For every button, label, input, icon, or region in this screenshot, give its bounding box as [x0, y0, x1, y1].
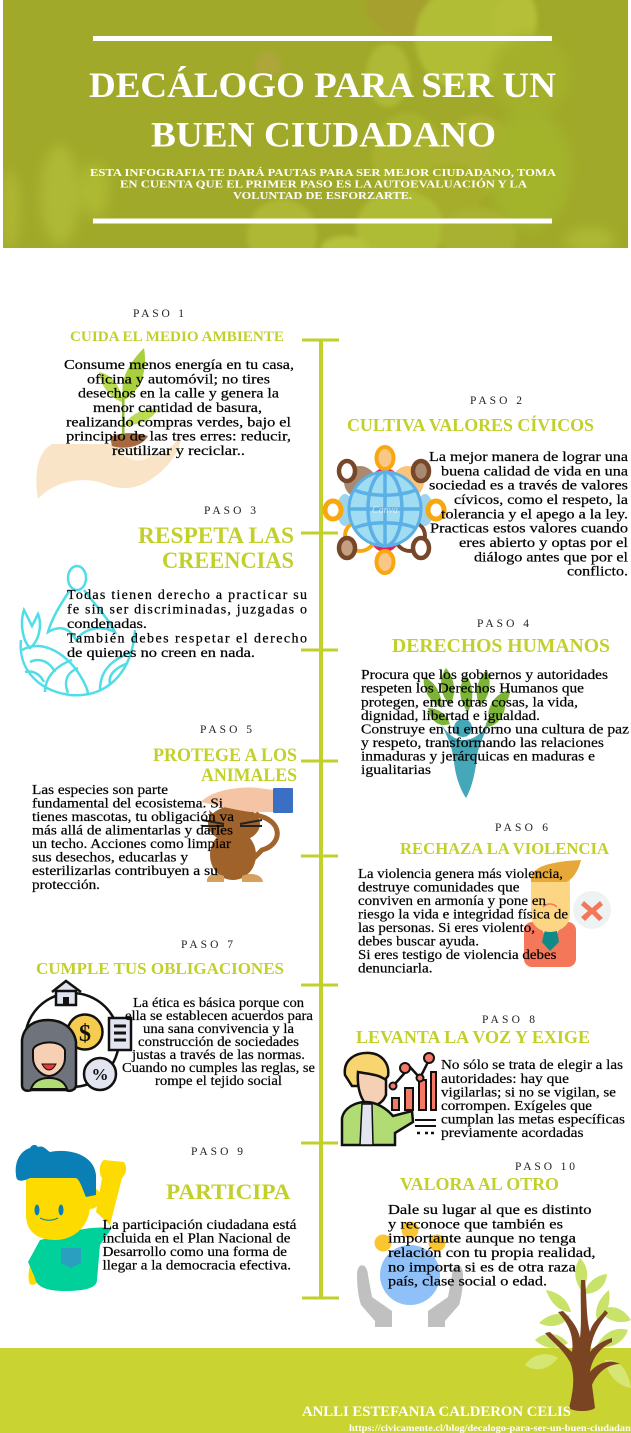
body text: La ética es básica porque con: [133, 995, 304, 1010]
body text: Cuando no cumples las reglas, se: [122, 1060, 315, 1075]
body text: principio de las tres erres: reducir,: [66, 430, 291, 445]
body text: inmaduras y jerárquicas en maduras e: [361, 748, 595, 764]
heading: PROTEGE A LOS: [153, 745, 297, 766]
body text: corrompen. Exígeles que: [441, 1098, 592, 1113]
body text: sus desechos, educarlas y: [32, 850, 188, 864]
body text: respeten los Derechos Humanos que: [361, 680, 584, 696]
author name: ANLLI ESTEFANIA CALDERON CELIS: [302, 1404, 571, 1420]
body text: La mejor manera de lograr una: [429, 450, 629, 465]
body text: Consume menos energía en tu casa,: [64, 358, 294, 373]
body text: Si eres testigo de violencia debes: [358, 947, 556, 962]
step label: PASO 4: [477, 618, 529, 630]
body text: La participación ciudadana está: [102, 1217, 296, 1232]
body text: Procura que los gobiernos y autoridades: [361, 667, 608, 682]
heading: CULTIVA VALORES CÍVICOS: [347, 414, 594, 435]
banner top rule: [93, 36, 552, 41]
heading: [138, 523, 294, 573]
body text: cumplan las metas específicas: [441, 1112, 625, 1126]
body text: [388, 1203, 596, 1290]
heading: VALORA AL OTRO: [400, 1174, 559, 1194]
body text: importante aunque no tenga: [388, 1232, 577, 1247]
icon: man with rising chart: [342, 1053, 436, 1145]
body text: buena calidad de vida en una: [441, 464, 629, 479]
subtitle: ESTA INFOGRAFIA TE DARÁ PAUTAS PARA SER MEJOR CIUDADANO, TOMA: [90, 167, 556, 179]
body text: país, clase social o edad.: [388, 1275, 547, 1290]
body text: sociedad es a través de valores: [429, 479, 628, 494]
subtitle: [90, 167, 556, 202]
body text: [358, 866, 568, 976]
panel: paso 7: [22, 939, 315, 1091]
panel: paso 2: [325, 395, 629, 580]
step label: PASO 6: [495, 822, 548, 834]
body text: denunciarla.: [358, 960, 432, 976]
body text: esterilizarlas contribuyen a su: [32, 863, 218, 878]
step label: PASO 5: [200, 724, 252, 736]
banner background photo: grapes: [0, 0, 628, 271]
subtitle: EN CUENTA QUE EL PRIMER PASO ES LA AUTOEVALUACIÓN Y LA: [120, 178, 527, 190]
banner bottom rule: [93, 218, 552, 224]
body text: menor cantidad de basura,: [93, 401, 262, 416]
icon: hand holding plant: [36, 348, 181, 499]
panel: paso 9: [16, 1145, 296, 1291]
body text: realizando compras verdes, bajo el: [66, 415, 291, 430]
step label: PASO 1: [133, 308, 184, 320]
body text: [64, 358, 294, 459]
body text: diálogo antes que por el: [474, 550, 628, 565]
main title: [89, 65, 556, 154]
heading: LEVANTA LA VOZ Y EXIGE: [356, 1027, 590, 1047]
body text: igualitarias: [361, 762, 431, 777]
body text: Construye en tu entorno una cultura de paz: [361, 722, 629, 736]
body text: y respeto, transformando las relaciones: [361, 735, 604, 750]
body text: [441, 1057, 625, 1140]
heading: ANIMALES: [201, 765, 297, 786]
body text: llegar a la democracia efectiva.: [102, 1258, 291, 1272]
icon: person with leaves: [424, 668, 510, 798]
body text: destruye comunidades que: [358, 880, 520, 894]
icon: woman with home, money and documents: [22, 981, 131, 1091]
step label: PASO 3: [204, 505, 256, 517]
icon: boy raising hand: [16, 1145, 126, 1291]
panel: paso 4: [361, 618, 629, 798]
panel: paso 1: [36, 308, 294, 499]
body text: rompe el tejido social: [155, 1073, 282, 1088]
body text: [67, 588, 307, 661]
body text: [361, 667, 629, 777]
body text: [122, 995, 315, 1088]
icon: sad man with cross: [524, 860, 611, 967]
body text: Practicas estos valores cuando: [430, 522, 628, 537]
icon: woman with home, money and documents: %: [92, 1065, 108, 1084]
heading: RECHAZA LA VIOLENCIA: [400, 839, 610, 858]
icon: woman with home, money and documents: $: [79, 1021, 91, 1047]
body text: y reconoce que también es: [388, 1217, 563, 1232]
panel: paso 6: [358, 822, 611, 976]
timeline: [301, 338, 339, 1300]
body text: dignidad, libertad e igualdad.: [361, 708, 540, 723]
body text: ella se establecen acuerdos para: [125, 1008, 313, 1023]
body text: más allá de alimentarlas y darles: [32, 822, 233, 838]
body text: Desarrollo como una forma de: [102, 1244, 287, 1259]
step label: PASO 2: [470, 395, 522, 407]
body text: [429, 450, 629, 580]
panel: paso 3: [21, 505, 307, 695]
subtitle: VOLUNTAD DE ESFORZARTE.: [233, 191, 412, 202]
body text: Todas tienen derecho a practicar su: [67, 588, 307, 603]
body text: eres abierto y optas por el: [459, 536, 628, 551]
body text: conflicto.: [567, 565, 628, 580]
panel: paso 5: [32, 724, 297, 892]
body text: oficina y automóvil; no tires: [87, 372, 270, 387]
main title: BUEN CIUDADANO: [151, 114, 496, 154]
panel: paso 8: [342, 1014, 625, 1145]
body text: cívicos, como el respeto, la: [454, 493, 629, 508]
icon: people around globe: [325, 447, 444, 573]
step label: PASO 7: [181, 939, 233, 951]
body text: desechos en la calle y genera la: [78, 387, 280, 402]
body text: Las especies son parte: [32, 782, 168, 797]
body text: relación con tu propia realidad,: [388, 1246, 596, 1261]
body text: una sana convivencia y la: [143, 1021, 294, 1036]
icon: hands holding globe: [357, 1222, 463, 1327]
icon: tree: [525, 1258, 631, 1411]
body text: debes buscar ayuda.: [358, 934, 479, 948]
body text: previamente acordadas: [441, 1125, 584, 1140]
footer band: [0, 1348, 631, 1433]
step label: PASO 8: [482, 1014, 535, 1026]
body text: un techo. Acciones como limpiar: [32, 836, 232, 851]
body text: de quienes no creen en nada.: [67, 646, 255, 661]
body text: [102, 1217, 296, 1272]
heading: DERECHOS HUMANOS: [392, 635, 610, 657]
body text: protegen, entre otras cosas, la vida,: [361, 694, 578, 710]
body text: justas a través de las normas.: [131, 1047, 305, 1062]
body text: tienes mascotas, tu obligación va: [32, 809, 234, 824]
heading: [153, 745, 297, 786]
heading: CUIDA EL MEDIO AMBIENTE: [70, 329, 284, 345]
heading: RESPETA LAS: [138, 523, 294, 548]
body text: autoridades: hay que: [441, 1071, 569, 1086]
step label: PASO 9: [191, 1146, 243, 1158]
body text: Dale su lugar al que es distinto: [388, 1203, 592, 1218]
body text: No sólo se trata de elegir a las: [441, 1057, 623, 1072]
heading: PARTICIPA: [166, 1179, 291, 1204]
body text: conviven en armonía y pone en: [358, 893, 546, 908]
body text: condenadas.: [67, 617, 147, 632]
heading: CREENCIAS: [162, 548, 294, 573]
body text: vigilarlas; si no se vigilan, se: [441, 1084, 616, 1100]
body text: reutilizar y reciclar..: [112, 444, 245, 459]
body text: riesgo la vida e integridad física de: [358, 906, 568, 922]
step label: PASO 10: [515, 1161, 575, 1173]
body text: [32, 782, 234, 892]
body text: tolerancia y el apego a la ley.: [441, 507, 628, 522]
panel: paso 10: [357, 1161, 596, 1327]
header banner: [0, 0, 628, 271]
main title: DECÁLOGO PARA SER UN: [89, 65, 556, 105]
body text: protección.: [32, 877, 100, 892]
body text: También debes respetar el derecho: [67, 632, 307, 646]
body text: fe sin ser discriminadas, juzgadas o: [67, 602, 307, 618]
heading: CUMPLE TUS OBLIGACIONES: [36, 959, 284, 978]
body text: construcción de sociedades: [138, 1034, 299, 1049]
icon: people around globe: Canva: [372, 505, 398, 516]
body text: no importa si es de otra raza,: [388, 1260, 580, 1275]
body text: las personas. Si eres violento,: [358, 920, 535, 935]
body text: La violencia genera más violencia,: [358, 866, 563, 881]
body text: fundamental del ecosistema. Si: [32, 796, 223, 810]
icon: meditating figure outline: [21, 566, 135, 695]
icon: hand petting cat: [201, 788, 293, 882]
body text: incluida en el Plan Nacional de: [102, 1230, 290, 1246]
